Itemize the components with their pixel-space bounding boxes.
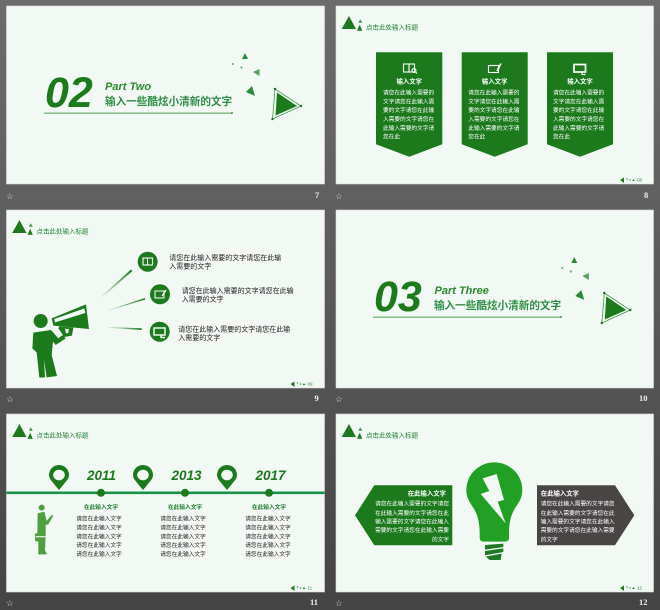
ribbon 1: 入需要的文字请您在 (383, 115, 434, 123)
pin 2013 (133, 465, 153, 490)
play triangle (271, 88, 302, 120)
item 2 (150, 284, 294, 304)
rays (100, 270, 145, 330)
item 1 (138, 252, 281, 272)
ribbon 1: 要的文字请您在此输 (383, 106, 434, 114)
column 2017: 请您在此输入文字 (245, 524, 291, 532)
callout: right: 需要的文字请您在此输入需要 (541, 526, 615, 534)
ribbon 2: 输入文字 (482, 77, 507, 86)
column 2013: 请您在此输入文字 (160, 524, 206, 532)
slide 12: light bulb (335, 414, 654, 609)
callout: right: 的文字 (541, 535, 558, 543)
column 2013 (160, 503, 206, 558)
column 2013: 请您在此输入文字 (160, 515, 206, 523)
star icon: ☆ (335, 395, 343, 405)
ribbon 2: 您在此 (468, 133, 486, 141)
column 2011: 请您在此输入文字 (76, 524, 122, 532)
page number: 10 (639, 393, 648, 403)
ribbon 1: 文字请您在此输入需 (383, 98, 434, 106)
slide 7: section Part Two (6, 6, 324, 202)
header: 点击此处输入标题 (36, 430, 89, 439)
ribbon 3: 输入文字 (567, 77, 593, 86)
page number: 12 (639, 597, 648, 607)
item 3: 入需要的文字 (178, 333, 220, 342)
column 2013: 请您在此输入文字 (160, 541, 206, 549)
icon: pen (155, 290, 166, 298)
ribbon 2: 请您在此输入需要的 (468, 89, 520, 97)
star icon: ☆ (335, 599, 343, 609)
callout: right: 请您在此输入需要的文字请您 (541, 500, 615, 508)
page number: 8 (644, 190, 648, 200)
column 2013: 请您在此输入文字 (160, 532, 206, 540)
ribbon 2: 文字请您在此输入需 (468, 98, 520, 106)
callout: left: 请您在此输入需要的文字请您 (375, 500, 449, 508)
ribbon 1: 输入文字 (397, 77, 422, 86)
slide 8: three ribbons (335, 6, 654, 202)
icon: person with megaphone (32, 304, 89, 378)
column 2017: 请您在此输入文字 (245, 532, 291, 540)
icon: pen and board (488, 64, 501, 72)
ribbon 3: 要的文字请您在此输 (553, 106, 604, 114)
ribbon 2: 入需要的文字请您在 (468, 115, 520, 123)
ribbon 1: 此输入需要的文字请 (383, 124, 434, 132)
column 2011: 请您在此输入文字 (76, 541, 122, 549)
ribbon 2: 此输入需要的文字请 (468, 124, 520, 132)
callout: left: 的文字 (432, 535, 449, 543)
icon: screen (154, 328, 165, 338)
slide 11: timeline (6, 414, 324, 609)
page number: 9 (314, 393, 319, 403)
slide 9: megaphone (6, 210, 324, 405)
section number: 03 (374, 273, 422, 321)
header (342, 16, 418, 31)
item 3: 请您在此输入需要的文字请您在此输 (178, 324, 290, 334)
section label: Part Two (105, 81, 151, 93)
column 2013: 在此输入文字 (168, 503, 202, 511)
column 2011: 在此输入文字 (84, 503, 118, 511)
column 2011: 请您在此输入文字 (76, 515, 122, 523)
ribbon 1 (376, 52, 442, 157)
icon: standing person (35, 505, 53, 554)
year 2017: 2017 (254, 468, 287, 483)
ribbon 3: 请您在此输入需要的 (553, 89, 604, 97)
footer mark: 12 (637, 586, 643, 590)
footer mark: 08 (637, 178, 643, 182)
header: 点击此处输入标题 (36, 226, 89, 235)
icon: book search (404, 64, 417, 74)
ribbon 3: 入需要的文字请您在 (553, 115, 604, 123)
footer mark (620, 178, 643, 183)
ribbon 3: 文字请您在此输入需 (553, 98, 604, 106)
item 1: 请您在此输入需要的文字请您在此输 (169, 253, 281, 262)
star icon: ☆ (6, 599, 14, 609)
column 2011: 请您在此输入文字 (76, 532, 122, 540)
item 2: 请您在此输入需要的文字请您在此输 (182, 286, 294, 295)
callout: right: 在此输入文字 (541, 488, 579, 497)
timeline dots (97, 489, 273, 497)
ribbon 2 (462, 52, 528, 157)
column 2011 (76, 503, 122, 558)
ribbon 3 (547, 52, 613, 157)
footer mark (290, 586, 313, 591)
section number: 02 (45, 69, 93, 117)
icon: light bulb (466, 462, 522, 560)
callout: left: 在此输入文字 (408, 488, 446, 497)
item 3 (150, 322, 290, 342)
pin 2017 (217, 465, 237, 490)
section title: 输入一些酷炫小清新的文字 (434, 299, 561, 312)
header (12, 220, 89, 235)
footer mark: 11 (308, 586, 313, 590)
header: 点击此处输入标题 (366, 430, 418, 439)
item 2: 入需要的文字 (182, 294, 224, 304)
footer mark: 09 (308, 382, 313, 386)
section label: Part Three (434, 285, 489, 297)
callout: left: 在此输入需要的文字请您在此 (375, 509, 449, 517)
callout: right (537, 485, 634, 545)
decorative triangles (561, 257, 589, 300)
callout: left: 需要的文字请您在此输入需要 (375, 526, 449, 534)
ribbon 2: 要的文字请您在此输 (468, 106, 520, 114)
underline (373, 316, 562, 318)
decorative triangles (232, 53, 260, 96)
header (12, 424, 89, 439)
slide 10: section Part Three (335, 210, 654, 405)
callout: right: 输入需要的文字请您在此输入 (541, 517, 615, 525)
timeline bar (6, 492, 324, 494)
star icon: ☆ (6, 192, 14, 202)
underline (44, 112, 233, 114)
year 2013: 2013 (170, 468, 202, 483)
ribbon 3: 您在此 (553, 133, 570, 141)
column 2011: 请您在此输入文字 (76, 550, 122, 558)
column 2017 (245, 503, 291, 558)
ribbon 1: 请您在此输入需要的 (383, 89, 434, 97)
callout: right: 在此输入需要的文字请您在此 (541, 509, 615, 517)
icon: screen (574, 64, 586, 74)
pin 2011 (49, 465, 69, 490)
column 2017: 请您在此输入文字 (245, 550, 291, 558)
column 2017: 请您在此输入文字 (245, 515, 291, 523)
ribbon 1: 您在此 (383, 133, 400, 141)
play triangle (601, 292, 632, 324)
column 2017: 在此输入文字 (252, 503, 286, 511)
item 1: 入需要的文字 (169, 262, 211, 271)
column 2017: 请您在此输入文字 (245, 541, 291, 549)
icon: book (143, 258, 152, 265)
header (342, 424, 418, 439)
ribbon 3: 此输入需要的文字请 (553, 124, 604, 132)
header: 点击此处输入标题 (366, 22, 418, 31)
page number: 11 (310, 597, 318, 607)
star icon: ☆ (335, 192, 343, 202)
footer mark (290, 382, 313, 387)
star icon: ☆ (6, 395, 14, 405)
column 2013: 请您在此输入文字 (160, 550, 206, 558)
section title: 输入一些酷炫小清新的文字 (105, 95, 232, 108)
footer mark (620, 586, 643, 591)
page number: 7 (315, 190, 320, 200)
callout: left (355, 485, 452, 545)
year 2011: 2011 (86, 468, 116, 483)
callout: left: 输入需要的文字请您在此输入 (375, 517, 449, 525)
